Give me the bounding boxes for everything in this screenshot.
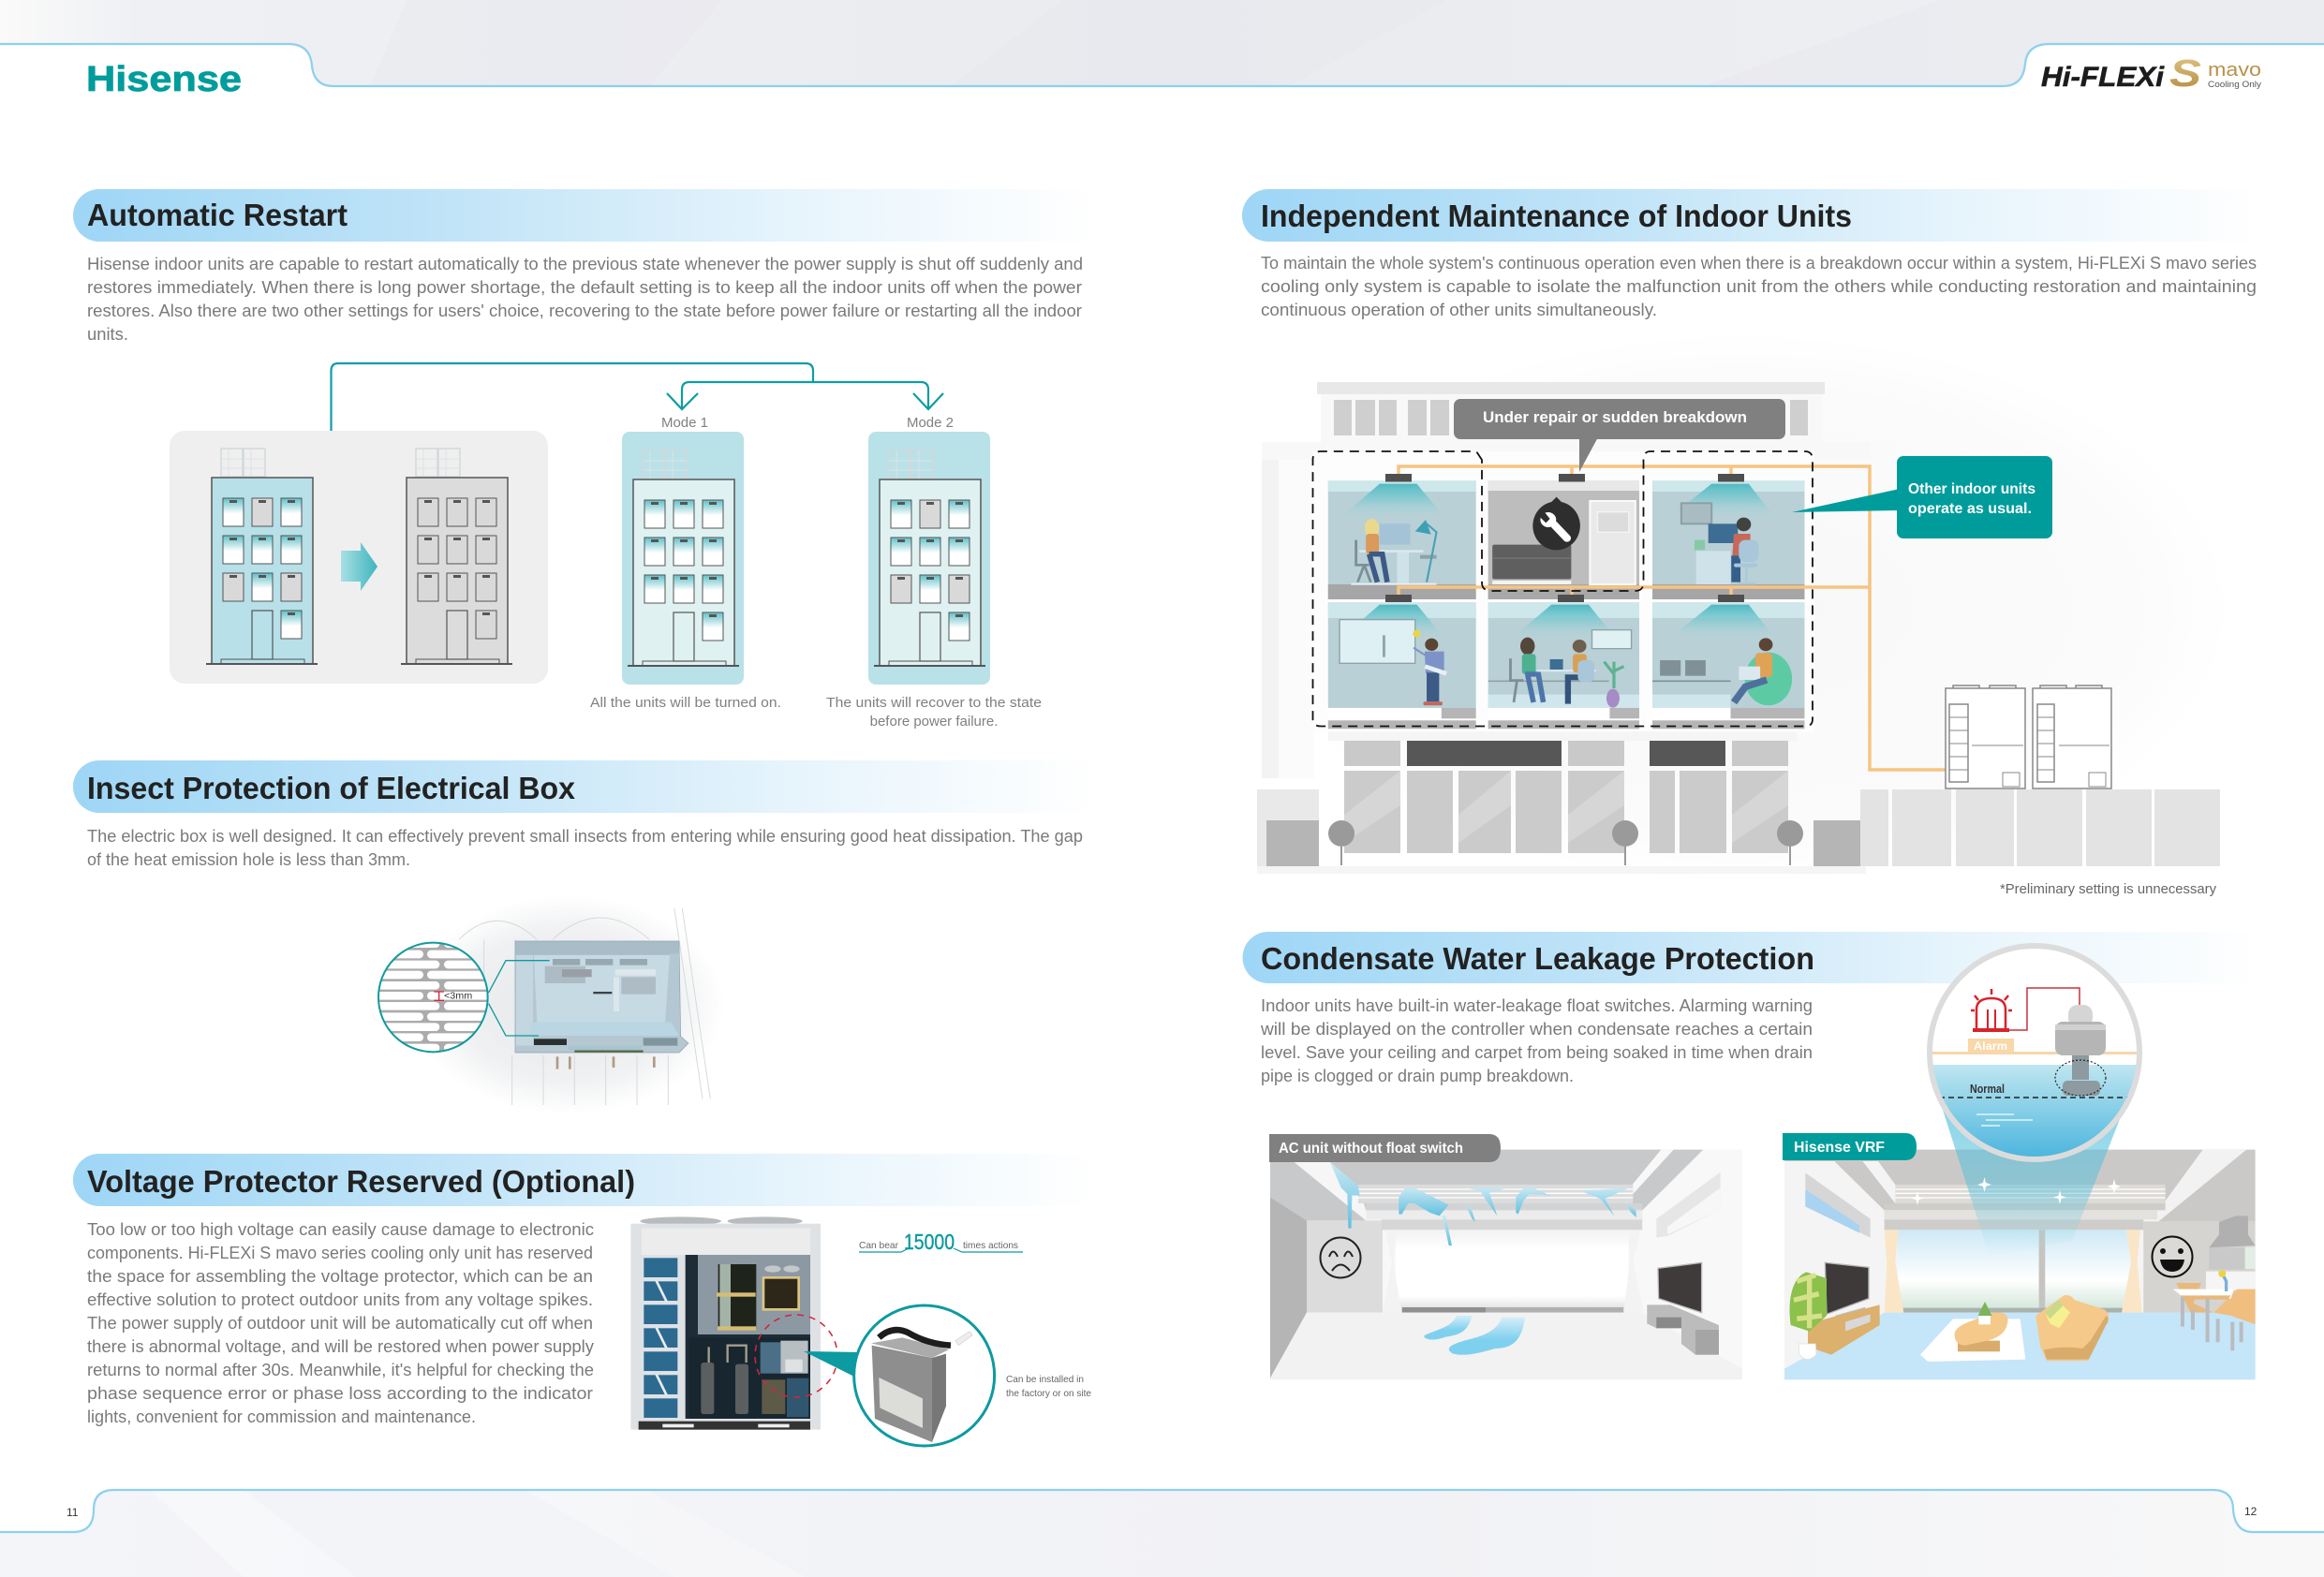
- text: voltage protector description: components. Hi-FLEXi S mavo series cooling only unit has reserved: [87, 1244, 593, 1262]
- page number 12: 12: [2244, 1505, 2257, 1518]
- logo: Hi-FLEXi S mavo: mavo: [2208, 60, 2261, 81]
- callout: other indoor units: [1792, 456, 2052, 538]
- text: automatic restart description: restores. Also there are two other settings for users' choice, recovering to the state before power failure or restarting all the indoor: [87, 302, 1082, 320]
- fence: [1860, 789, 2220, 866]
- heading bar: Insect Protection: [73, 760, 1096, 813]
- logo: Hi-FLEXi S mavo: S: [2169, 52, 2201, 95]
- sparkles: [1911, 1177, 2121, 1205]
- callout: installation note: [1006, 1374, 1091, 1399]
- label: Mode 1: Mode 1: [661, 415, 708, 431]
- light beam from magnifier: [1942, 1107, 2122, 1257]
- building: mode 1 all on: [628, 450, 739, 666]
- callout: other indoor units: Other indoor units: [1908, 481, 2035, 497]
- text: voltage protector description: the space for assembling the voltage protector, which can be an: [87, 1267, 593, 1286]
- tag: AC unit without float switch: [1269, 1134, 1501, 1162]
- building: mode 2 recovered: [874, 450, 985, 666]
- pointer to protector: [804, 1351, 862, 1377]
- icon: wrench: [1532, 497, 1580, 550]
- text: insect protection description: The electric box is well designed. It can effectively prevent small insects from entering while ensuring good heat dissipation. The gap: [87, 827, 1083, 846]
- illustration: electrical box: [412, 896, 724, 1114]
- magnifier: float switch: [1920, 946, 2145, 1168]
- callout: can bear 15000 times actions: times actions: [963, 1240, 1018, 1251]
- caption: mode 2: before power failure.: [870, 714, 998, 730]
- icon: sad face: [1321, 1238, 1360, 1277]
- normal label: Normal: [1970, 1083, 2005, 1096]
- text: automatic restart description: units.: [87, 325, 128, 344]
- text: voltage protector description: The power supply of outdoor unit will be automatically cut off when: [87, 1314, 593, 1333]
- room: lower middle: [1488, 602, 1639, 729]
- callout: can bear 15000 times actions: [859, 1230, 1023, 1254]
- icon: happy face: [2153, 1236, 2192, 1277]
- text: voltage protector description: returns to normal after 30s. Meanwhile, it's helpful for checking the: [87, 1361, 594, 1379]
- panel: power failure buildings: [170, 431, 548, 684]
- alarm label: Alarm: [1974, 1039, 2007, 1053]
- refrigerant pipes: [1399, 466, 1946, 770]
- text: condensate description: will be displayed on the controller when condensate reaches a certain: [1260, 1020, 1813, 1039]
- ceiling leaks: [1330, 1162, 1636, 1245]
- text: independent maintenance description: To maintain the whole system's continuous operation even when there is a breakdown occur within a system, Hi-FLEXi S mavo series: [1261, 254, 2257, 273]
- room: Hisense VRF: [1784, 1150, 2256, 1379]
- rooms on two floors: [1328, 480, 1804, 729]
- panel: mode 1: [622, 432, 744, 685]
- text: voltage protector description: [87, 1220, 594, 1426]
- text: independent maintenance description: [1261, 254, 2257, 319]
- room: lower right: [1652, 602, 1804, 729]
- text: independent maintenance description: continuous operation of other units simultaneously.: [1261, 301, 1657, 319]
- dashed highlight circle: [755, 1315, 837, 1397]
- outdoor units: [1946, 685, 2111, 788]
- page number 11: 11: [67, 1506, 79, 1519]
- logo: Hi-FLEXi S mavo: Hi-FLEXi: [2041, 62, 2165, 93]
- tag: Hisense VRF: [1783, 1133, 1917, 1160]
- heading bar: Automatic Restart: Automatic Restart: [87, 198, 348, 232]
- caption: mode 2: The units will recover to the state: [826, 695, 1042, 711]
- floor puddles: [1424, 1316, 1525, 1355]
- room: lower left: [1328, 602, 1476, 729]
- indoor units: [1385, 474, 1744, 602]
- photo: outdoor unit interior: [630, 1216, 821, 1430]
- callout: installation note: the factory or on site: [1006, 1388, 1091, 1399]
- text: voltage protector description: phase sequence error or phase loss according to the indicator: [87, 1384, 593, 1403]
- text: insect protection description: [87, 827, 1083, 869]
- magnifier: heat emission holes under 3mm: [375, 939, 491, 1052]
- panel: mode 2: [868, 432, 990, 685]
- connector with mode arrows: [332, 363, 943, 431]
- text: automatic restart description: Hisense indoor units are capable to restart automatically to the previous state whenever the power supply is shut off suddenly and: [87, 255, 1083, 273]
- heading bar: Condensate: Condensate Water Leakage Protection: [1261, 941, 1814, 976]
- text: voltage protector description: lights, convenient for commission and maintenance.: [87, 1408, 476, 1426]
- text: automatic restart description: restores immediately. When there is long power shortage, the default setting is to keep all the indoor units off when the power: [87, 278, 1082, 297]
- arrow: power failure: [341, 542, 377, 591]
- dashed outline: units in operation: [1313, 451, 1813, 727]
- magnifier: voltage protector box: [854, 1305, 995, 1446]
- text: independent maintenance description: cooling only system is capable to isolate the malfunction unit from the others while conducting restoration and maintaining: [1261, 277, 2257, 296]
- tag: Hisense VRF: Hisense VRF: [1794, 1140, 1885, 1156]
- logo: Hi-FLEXi S mavo: [2041, 52, 2261, 95]
- ground floor facade: [1257, 741, 1866, 874]
- heading bar: Independent Maintenance: [1242, 189, 2262, 242]
- icon: alarm: [1971, 989, 2012, 1030]
- logo: Hi-FLEXi S mavo: Cooling Only: [2208, 80, 2261, 90]
- callout: under repair: [1454, 399, 1785, 472]
- room: AC unit without float switch: [1270, 1150, 1742, 1379]
- text: condensate description: level. Save your ceiling and carpet from being soaked in time when drain: [1261, 1043, 1813, 1062]
- callout: other indoor units: operate as usual.: [1908, 501, 2032, 517]
- caption: mode 2: [826, 695, 1042, 730]
- callout: can bear 15000 times actions: 15000: [904, 1230, 955, 1254]
- illustration: office building: [1257, 332, 2231, 885]
- caption: mode 1: All the units will be turned on.: [590, 695, 781, 711]
- wire: [2009, 988, 2080, 1030]
- text: voltage protector description: there is abnormal voltage, and will be restored when power supply: [87, 1337, 594, 1356]
- callout: under repair: Under repair or sudden breakdown: [1483, 408, 1747, 426]
- text: voltage protector description: Too low or too high voltage can easily cause damage to electronic: [87, 1220, 594, 1239]
- logo: Hisense: Hisense: [86, 60, 242, 99]
- text: condensate description: pipe is clogged or drain pump breakdown.: [1261, 1067, 1574, 1085]
- alarm label: [1968, 1039, 2014, 1053]
- magnifier: heat emission holes under 3mm: <3mm: [444, 992, 472, 1002]
- heading bar: Independent Maintenance: Independent Maintenance of Indoor Units: [1261, 199, 1852, 233]
- callout: installation note: Can be installed in: [1006, 1374, 1084, 1385]
- room: upper left: [1328, 480, 1476, 599]
- callout: can bear 15000 times actions: Can bear: [859, 1240, 898, 1251]
- header band: [0, 0, 2324, 86]
- heading bar: Condensate: [1242, 932, 2262, 983]
- text: condensate description: [1260, 996, 1813, 1085]
- building: before power failure: [206, 449, 318, 664]
- tag: AC unit without float switch: AC unit without float switch: [1279, 1141, 1463, 1157]
- text: automatic restart description: [87, 255, 1083, 344]
- footer band: [0, 1490, 2324, 1577]
- text: insect protection description: of the heat emission hole is less than 3mm.: [87, 850, 410, 869]
- heading bar: Insect Protection: Insect Protection of Electrical Box: [87, 771, 576, 805]
- heading bar: Voltage Protector: Voltage Protector Reserved (Optional): [87, 1164, 635, 1199]
- building: power off: [401, 449, 512, 664]
- text: condensate description: Indoor units have built-in water-leakage float switches. Alarming warning: [1261, 996, 1813, 1015]
- text: voltage protector description: effective solution to protect outdoor units from any voltage spikes.: [87, 1290, 593, 1309]
- room: upper right: [1652, 480, 1804, 599]
- heading bar: Automatic Restart: [73, 189, 1096, 242]
- note: preliminary setting: *Preliminary setting is unnecessary: [2000, 881, 2216, 897]
- heading bar: Voltage Protector: [73, 1154, 1096, 1206]
- label: Mode 2: Mode 2: [907, 415, 954, 431]
- room: upper middle breakdown: [1488, 480, 1639, 599]
- float switch: [2055, 1005, 2106, 1096]
